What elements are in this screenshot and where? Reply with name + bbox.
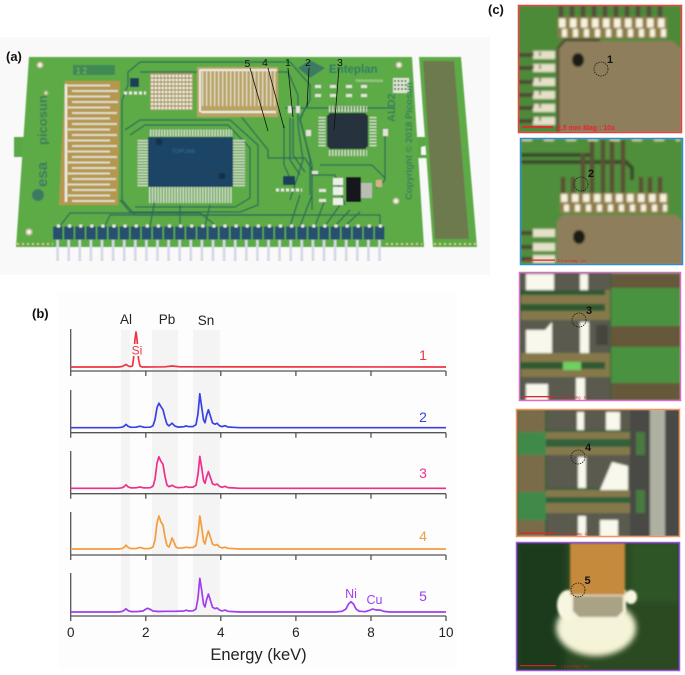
peak labels Ni and Cu: Cu bbox=[367, 593, 383, 607]
spectrum 3 bbox=[71, 456, 446, 488]
frame 5 bbox=[516, 542, 680, 670]
pin header bbox=[53, 226, 386, 251]
micrograph 5 bbox=[516, 542, 680, 671]
tiny chips bbox=[124, 78, 302, 190]
spot label 2: 2 bbox=[588, 168, 594, 180]
x axis tick labels: 6 bbox=[292, 625, 300, 640]
spectrum 4 bbox=[71, 516, 446, 549]
spectrum numbers: 1 bbox=[419, 347, 427, 363]
square pad grid bbox=[150, 73, 193, 110]
board traces bbox=[60, 62, 395, 226]
x axis tick labels: 0 bbox=[67, 625, 74, 640]
peak label Si: Si bbox=[132, 344, 142, 358]
x axis tick labels bbox=[67, 625, 454, 640]
board silk text: Copyright © 2018 Picosun bbox=[404, 82, 415, 200]
scale bar 4 bbox=[520, 532, 590, 536]
spectrum 1 bbox=[71, 332, 446, 367]
measurement circle 5 bbox=[571, 583, 585, 597]
x axis tick labels: 4 bbox=[217, 625, 225, 640]
large processor chip bbox=[143, 133, 239, 195]
right comb sensor bbox=[197, 67, 278, 117]
element highlight bands bbox=[121, 330, 220, 616]
panel: (c) microscope images bbox=[488, 2, 683, 671]
scale bar 2: 2.5 mm Mag : 10x bbox=[558, 259, 586, 263]
surface-mount components bbox=[288, 85, 388, 202]
scale bar 2 bbox=[525, 259, 586, 263]
panel: (b) EDS spectra bbox=[32, 292, 457, 669]
measurement circle 3 bbox=[572, 313, 586, 327]
scale bar 1 bbox=[522, 125, 615, 132]
callout numbers: 5 bbox=[244, 58, 250, 70]
spectrum 5 bbox=[71, 578, 446, 612]
small microcontroller chip bbox=[322, 109, 373, 153]
x axis title: Energy (keV) bbox=[210, 646, 307, 664]
board edge pads bbox=[17, 243, 476, 245]
board silk text bbox=[32, 60, 415, 201]
scale bar 1: 2.5 mm Mag : 10x bbox=[557, 125, 615, 132]
panel: (a) PCB photograph bbox=[0, 37, 490, 275]
x axis tick labels: 2 bbox=[142, 625, 150, 640]
element labels: Pb bbox=[159, 312, 175, 327]
scale bar 5: 2.5 mm Mag : 10x bbox=[561, 664, 589, 668]
spectrum numbers: 3 bbox=[419, 465, 427, 481]
panel label (c): (c) bbox=[488, 2, 504, 17]
scale bar 4: 2.5 mm Mag : 10x bbox=[562, 532, 590, 536]
board silk text: ALD2 bbox=[386, 93, 398, 122]
callout numbers: 2 bbox=[305, 57, 311, 69]
left comb sensor bbox=[59, 81, 120, 205]
frame 2 bbox=[520, 138, 682, 264]
callout numbers: 4 bbox=[262, 57, 268, 69]
scale bar 3: 2.5 mm Mag : 10x bbox=[561, 396, 589, 400]
callout numbers: 3 bbox=[337, 57, 343, 69]
spot label 3: 3 bbox=[586, 305, 592, 317]
circuit board bbox=[14, 57, 477, 251]
frame 3 bbox=[520, 272, 680, 400]
peak labels Ni and Cu: Ni bbox=[345, 587, 357, 601]
element labels: Sn bbox=[198, 313, 214, 328]
spectrum 2 bbox=[71, 394, 446, 428]
spot label 1: 1 bbox=[607, 54, 613, 66]
frame 4 bbox=[516, 410, 680, 536]
callout numbers bbox=[244, 57, 343, 70]
board silk text: esa bbox=[34, 161, 51, 187]
micrograph 2 bbox=[520, 138, 683, 265]
spectrum numbers bbox=[419, 347, 427, 604]
callout lines 1 to 5 bbox=[250, 68, 339, 131]
panel label (b): (b) bbox=[32, 306, 49, 321]
board silk text: Enteplan bbox=[329, 64, 378, 76]
x axis tick labels: 10 bbox=[438, 625, 454, 640]
measurement circle 2 bbox=[574, 177, 588, 191]
micrograph 1 bbox=[518, 5, 682, 133]
spot label 4: 4 bbox=[585, 442, 592, 454]
spot label 5: 5 bbox=[584, 575, 591, 587]
axes bbox=[71, 329, 446, 621]
board silk text: 1 2 bbox=[76, 66, 88, 76]
chip marking: TOPLINE bbox=[172, 149, 196, 155]
voltage regulator bbox=[333, 177, 372, 205]
callout numbers: 1 bbox=[285, 57, 291, 69]
micrograph 3 bbox=[519, 272, 681, 401]
spectrum numbers: 4 bbox=[419, 528, 427, 544]
spectrum numbers: 5 bbox=[419, 588, 427, 604]
element labels bbox=[120, 312, 214, 328]
element labels: Al bbox=[120, 312, 132, 327]
board silk text: 75004005/0008 bbox=[355, 78, 384, 83]
x axis tick labels: 8 bbox=[367, 625, 375, 640]
measurement circle 4 bbox=[571, 450, 585, 464]
frame 1 bbox=[518, 6, 682, 132]
measurement circle 1 bbox=[594, 62, 608, 76]
panel label (a): (a) bbox=[6, 49, 22, 64]
scale bar 3 bbox=[522, 396, 589, 400]
peak labels Ni and Cu bbox=[345, 587, 383, 607]
board silk text: picosun bbox=[35, 95, 50, 145]
scale bar 5 bbox=[520, 664, 589, 668]
spectrum numbers: 2 bbox=[419, 409, 427, 425]
mounting holes bbox=[26, 62, 402, 235]
micrograph 4 bbox=[516, 409, 680, 537]
